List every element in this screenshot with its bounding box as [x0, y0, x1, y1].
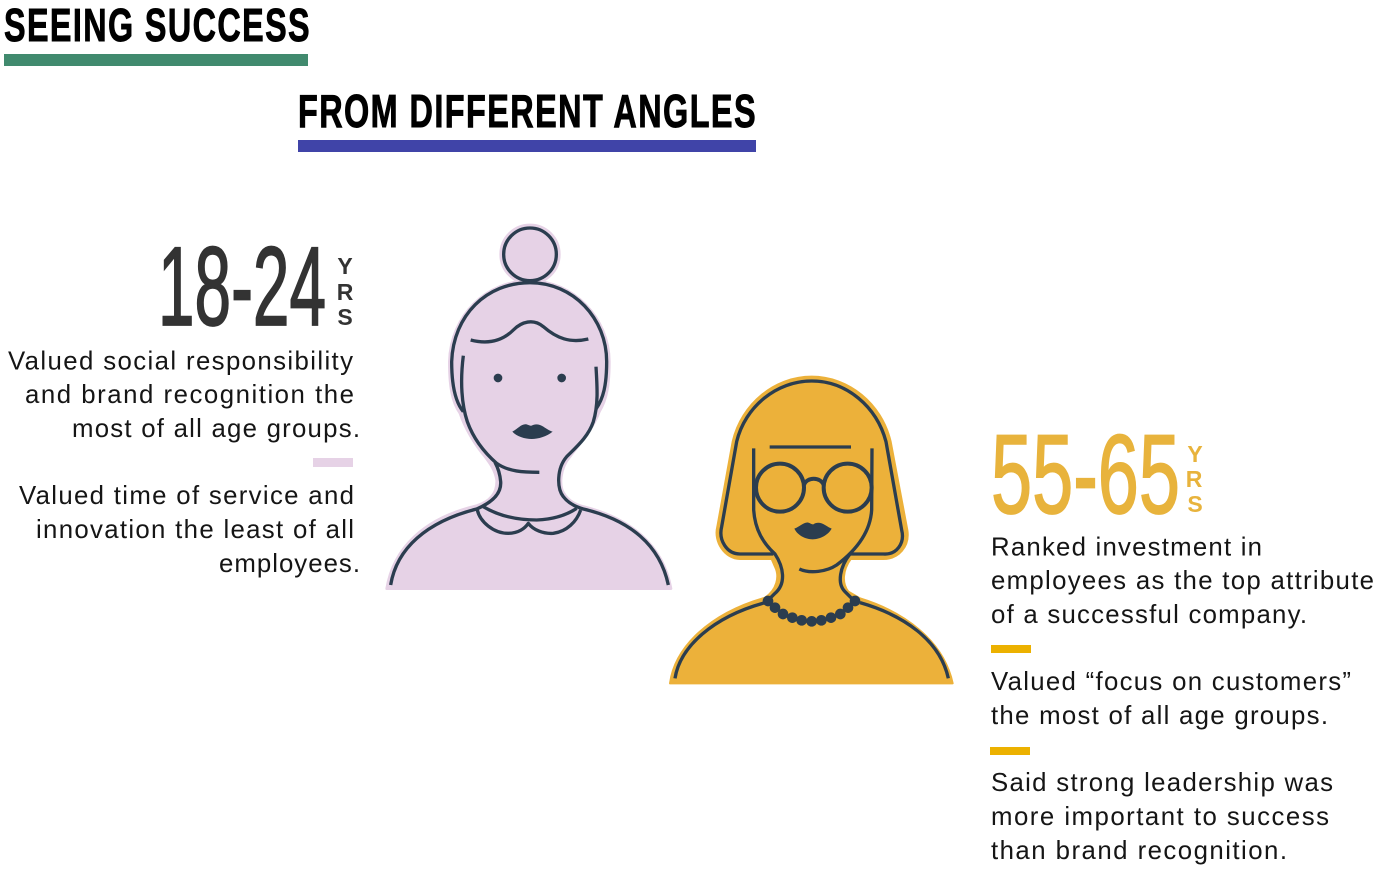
heading: from different angles [298, 85, 757, 152]
text block: least valued [19, 482, 360, 578]
text block: strong leadership [991, 769, 1333, 865]
divider bar yellow [991, 645, 1031, 653]
yrs label pink group: Y [337, 253, 353, 279]
hair outline [452, 283, 607, 412]
divider bar yellow second [990, 747, 1030, 755]
text block: investment in employees: Ranked investment in [991, 534, 1262, 562]
text block: most valued: most of all age groups. [72, 415, 360, 443]
panel: 55-65 age group text [990, 412, 1374, 865]
text block: least valued: Valued time of service and [19, 482, 354, 510]
age label 18-24: 18-24 [158, 224, 326, 349]
lips [512, 424, 553, 439]
yrs label pink group: S [337, 304, 353, 330]
text block: investment in employees [991, 534, 1374, 629]
text block: least valued: innovation the least of all [36, 516, 354, 544]
icon: older woman with glasses and necklace [670, 377, 953, 683]
eyes [494, 374, 566, 382]
heading: seeing success: SEEING SUCCESS [4, 0, 311, 51]
age label 55-65: 55-65 [991, 412, 1180, 537]
bangs [770, 442, 851, 452]
necklace [763, 596, 860, 627]
text block: focus on customers: Valued “focus on customers” [991, 668, 1351, 696]
panel: 18-24 age group text [8, 224, 360, 578]
text block: most valued: Valued social responsibility [8, 348, 353, 376]
yrs label yellow group: Y [1187, 441, 1203, 467]
fringe [471, 322, 588, 342]
shoulders [675, 603, 948, 678]
text block: least valued: employees. [219, 550, 360, 578]
text block: strong leadership: Said strong leadership was [991, 769, 1333, 797]
yrs label yellow group: S [1187, 491, 1203, 517]
collar [477, 507, 581, 533]
text block: investment in employees: of a successful company. [991, 601, 1307, 629]
lips [794, 523, 832, 539]
text block: focus on customers: the most of all age groups. [991, 702, 1328, 730]
text block: investment in employees: employees as the top attribute [991, 567, 1374, 595]
yrs label pink group [337, 253, 354, 330]
left neck and shoulder [391, 462, 501, 585]
text block: strong leadership: than brand recognition. [991, 837, 1287, 865]
heading: from different angles: FROM DIFFERENT ANGLES [298, 85, 757, 137]
face left and neck [754, 448, 783, 602]
glasses [756, 464, 872, 512]
text block: strong leadership: more important to success [991, 803, 1329, 831]
silhouette [670, 377, 953, 683]
heading: seeing success [4, 0, 311, 66]
yrs label pink group: R [337, 279, 354, 305]
divider bar pink [313, 458, 353, 467]
bun [504, 228, 556, 281]
face left and chin [462, 356, 539, 472]
hair outline [721, 381, 902, 554]
text block: focus on customers [991, 668, 1351, 730]
chin and face right [799, 448, 872, 572]
silhouette [387, 225, 671, 589]
yrs label yellow group: R [1186, 466, 1203, 492]
text block: most valued [8, 348, 360, 443]
icon: young woman with hair bun [387, 225, 671, 589]
right face, neck and shoulder [559, 367, 668, 585]
yrs label yellow group [1186, 441, 1203, 517]
right neck [840, 554, 855, 602]
text block: most valued: and brand recognition the [25, 381, 354, 409]
